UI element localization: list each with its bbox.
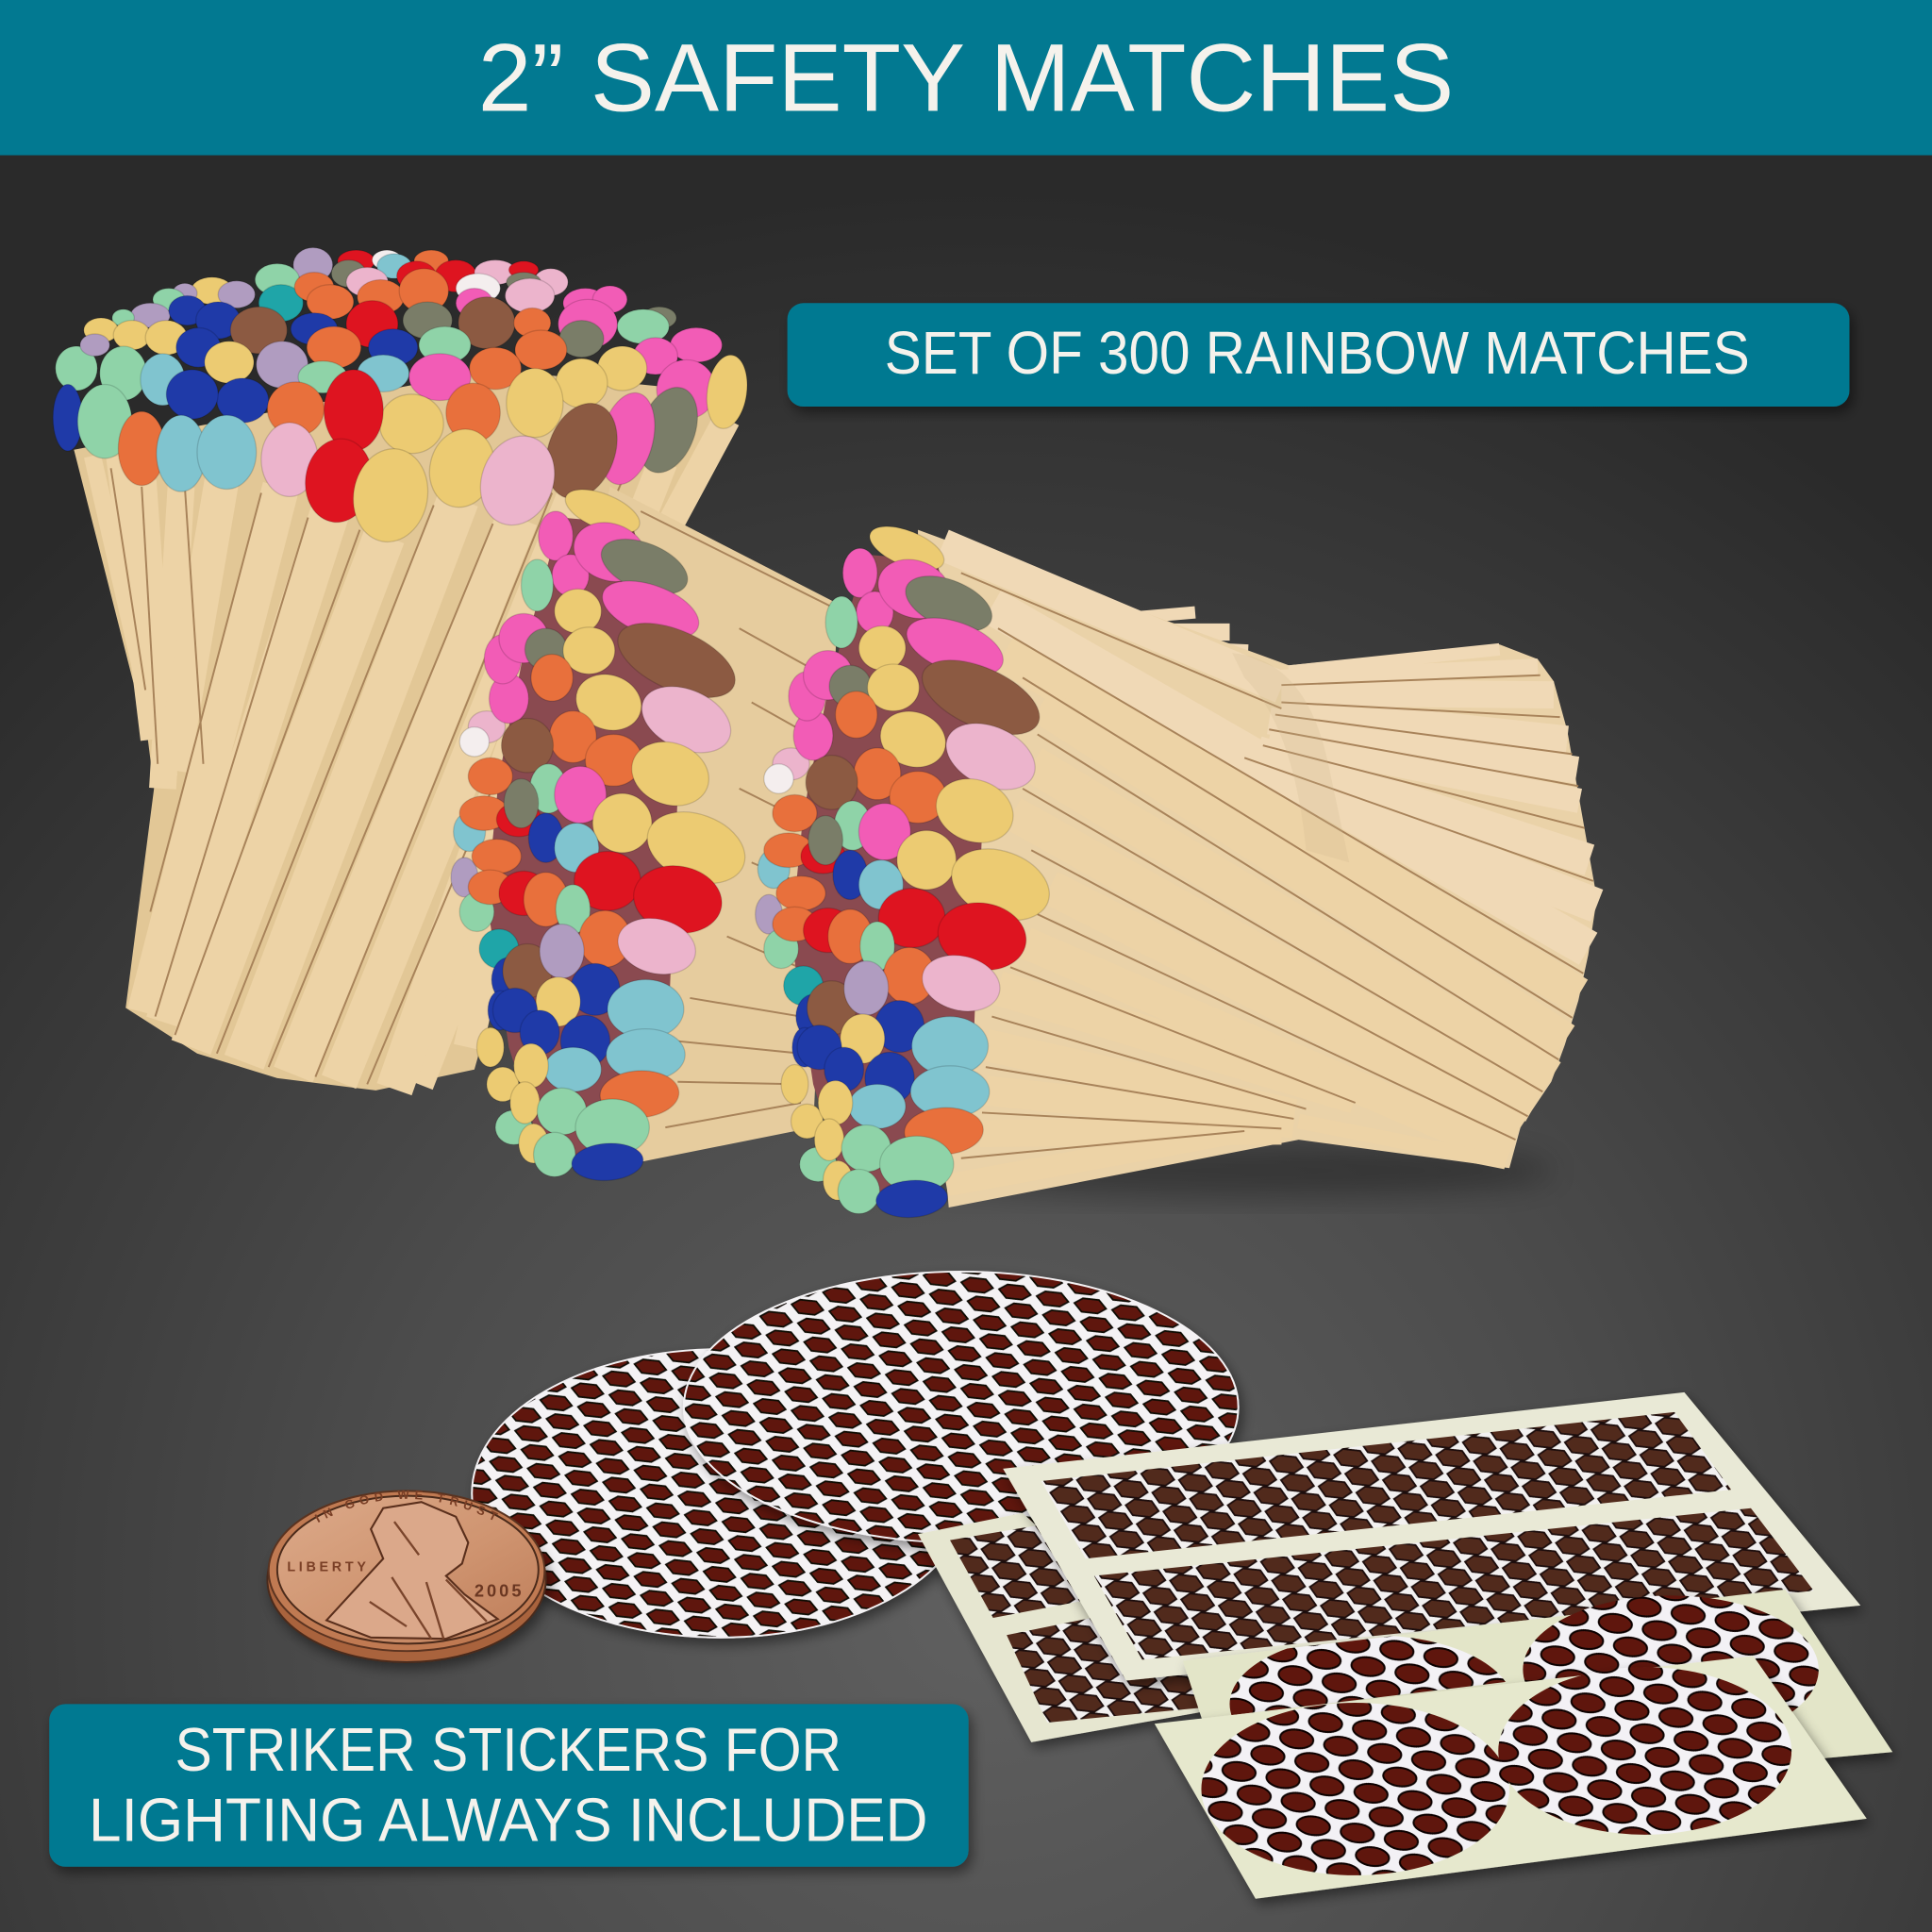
callout: striker stickers: LIGHTING ALWAYS INCLUDED [89, 1785, 928, 1854]
middle lying bundle of matches [451, 480, 850, 1183]
title: 2” SAFETY MATCHES [478, 25, 1454, 132]
match heads [53, 248, 752, 548]
callout: set of 300 rainbow matches: SET OF 300 RAINBOW MATCHES [885, 319, 1750, 387]
striker disc: lower [472, 1349, 970, 1638]
match heads [756, 518, 1059, 1220]
penny: IN GOD WE TRUST [315, 1491, 498, 1523]
match heads [451, 480, 755, 1183]
striker sheet: back left [918, 1513, 1232, 1742]
striker disc: upper [684, 1272, 1239, 1542]
header banner [0, 0, 1932, 156]
standing bundle of matches [53, 248, 752, 1091]
penny: 2005 [475, 1581, 521, 1601]
penny [266, 1490, 558, 1674]
striker sheet: top strips [1003, 1392, 1860, 1681]
paper tie band [1232, 653, 1349, 862]
portrait [326, 1502, 498, 1639]
callout: striker stickers: STRIKER STICKERS FOR [175, 1715, 841, 1784]
striker sheet: front circles [1155, 1656, 1867, 1899]
callout: set of 300 rainbow matches [788, 303, 1849, 407]
striker sheet: back circles [1181, 1589, 1894, 1767]
penny: LIBERTY [287, 1559, 366, 1574]
front lying bundle of matches [756, 518, 1597, 1220]
callout: striker stickers [49, 1704, 969, 1867]
